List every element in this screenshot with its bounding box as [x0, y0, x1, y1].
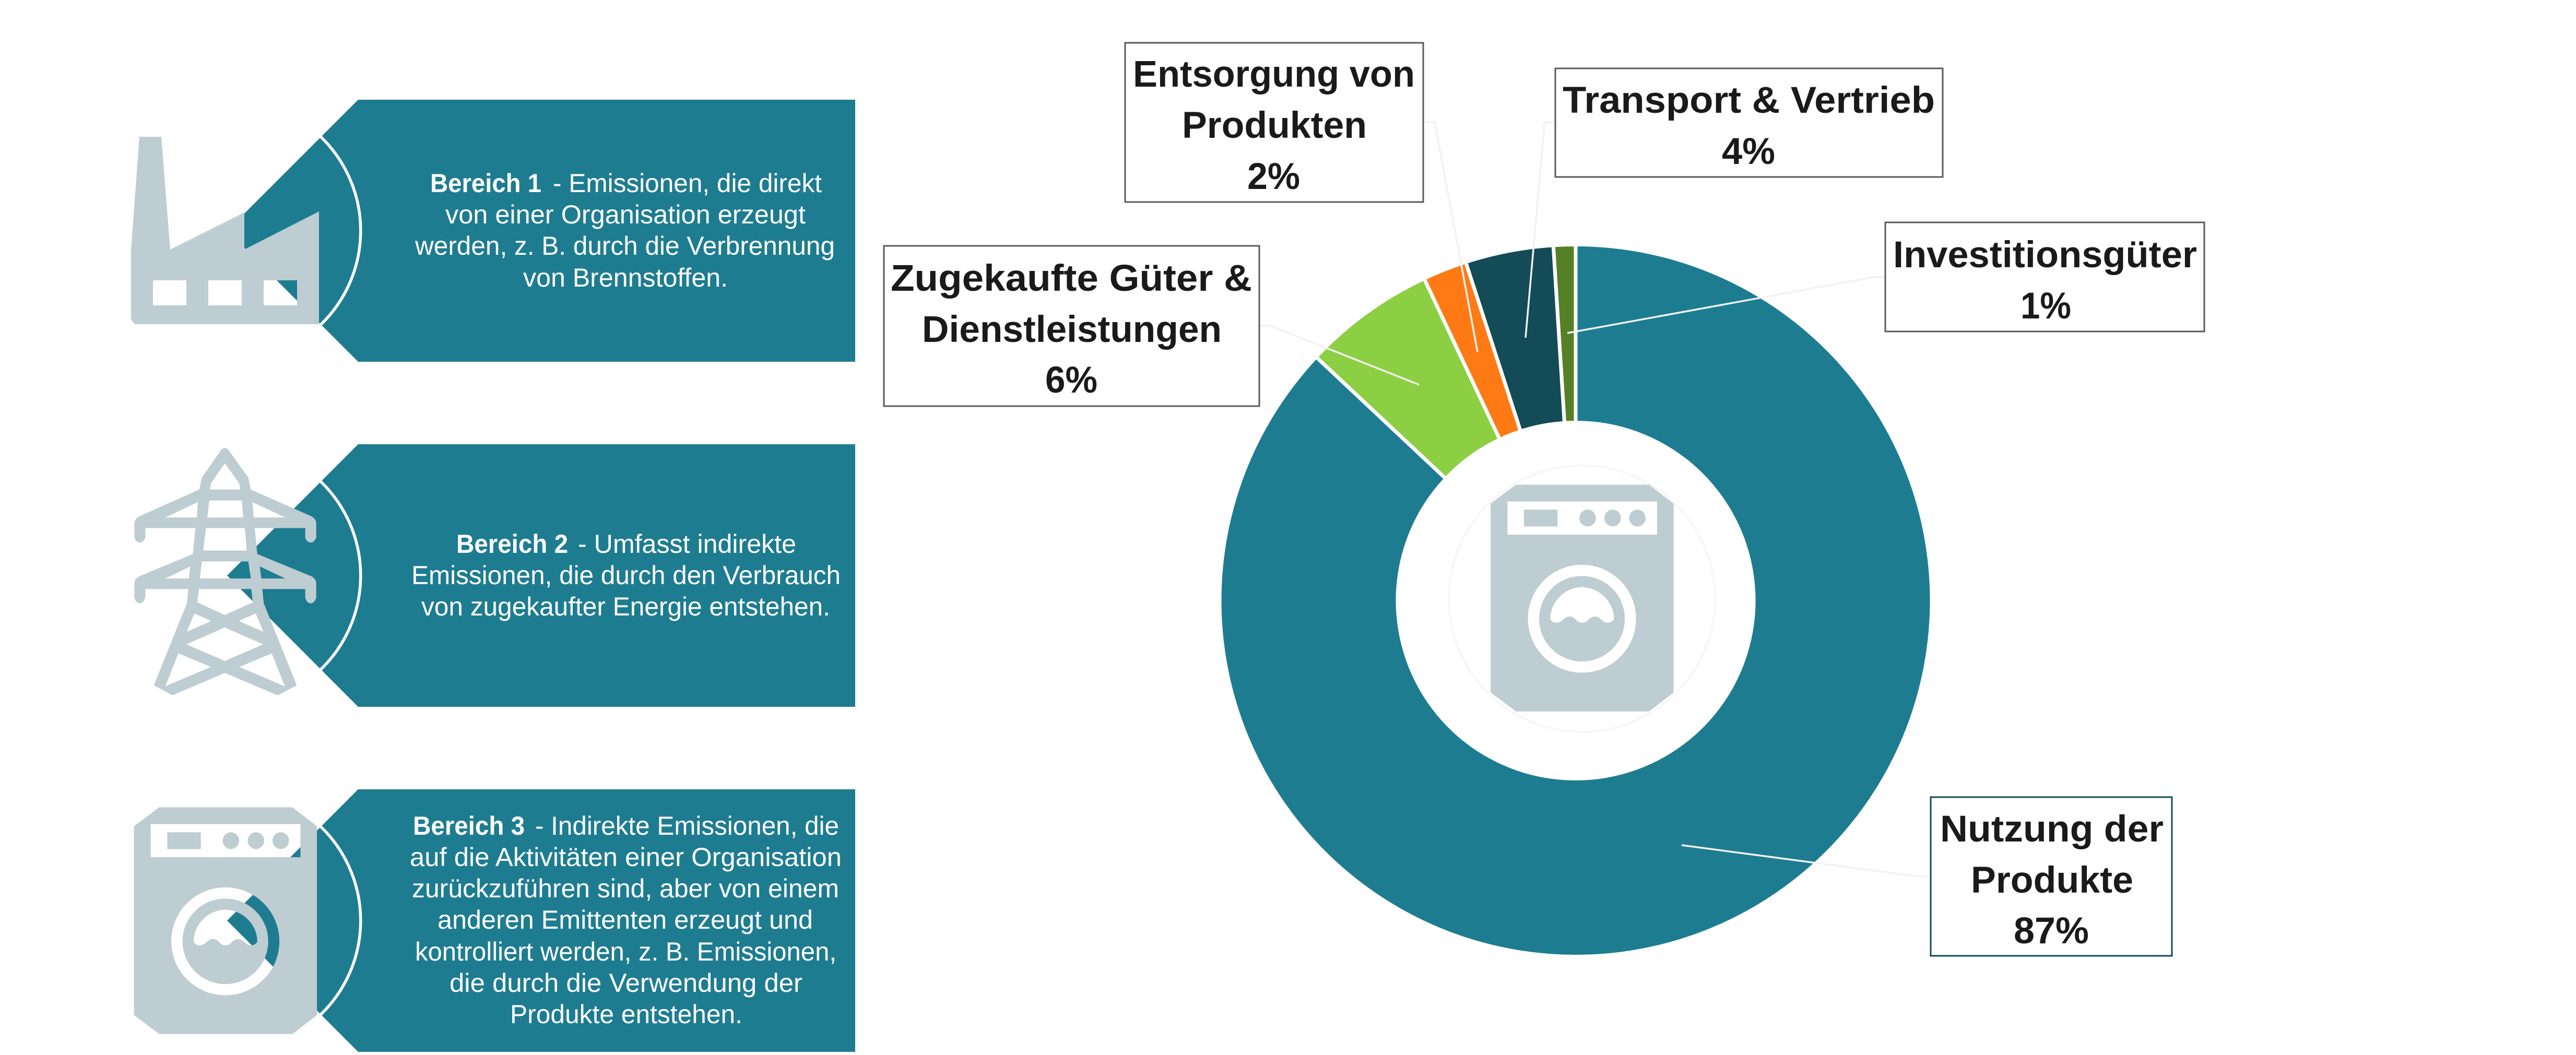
callout: Investitionsgüter: Investitionsgüter — [1893, 234, 2197, 276]
segment: Zugekaufte Güter 6% — [1316, 278, 1500, 479]
callout: Nutzung der Produkte — [1931, 797, 2172, 956]
text: Bereich 2: - Umfasst indirekte — [578, 529, 796, 559]
segment: Transport 4% — [1466, 245, 1565, 431]
callout: Investitionsgüter: 1% — [2020, 286, 2071, 327]
callout: Transport & Vertrieb — [1555, 68, 1943, 177]
panel: Bereich 2 — [134, 444, 855, 707]
text: Bereich 1: werden, z. B. durch die Verbrennung — [415, 231, 835, 260]
callout: Zugekaufte Güter & Dienstleistungen: Dienstleistungen — [922, 309, 1222, 350]
leader lines — [1259, 122, 1930, 876]
callout: Zugekaufte Güter & Dienstleistungen: 6% — [1045, 360, 1097, 401]
callout: Zugekaufte Güter & Dienstleistungen: Zugekaufte Güter & — [891, 258, 1252, 299]
text: Bereich 3: Bereich 3 — [413, 811, 525, 840]
segment: Investitionsgüter 1% — [1553, 244, 1576, 423]
text: Bereich 3: anderen Emittenten erzeugt und — [438, 905, 813, 934]
donut chart — [1220, 244, 1932, 956]
banner shape 3 — [227, 789, 855, 1052]
segment: Nutzung der Produkte 87% — [1220, 244, 1932, 956]
text: Bereich 1 — [415, 169, 835, 292]
arc divider 3 — [318, 825, 361, 1017]
text: Bereich 1: von Brennstoffen. — [523, 263, 728, 292]
text: Bereich 2 — [411, 529, 841, 621]
callout: Entsorgung von Produkten: 2% — [1247, 156, 1300, 197]
text: Bereich 2: Emissionen, die durch den Verbrauch — [411, 561, 841, 590]
panel: Bereich 1 — [131, 100, 855, 362]
center icon: washing machine — [1449, 466, 1715, 732]
text: Bereich 3: Produkte entstehen. — [510, 1000, 742, 1029]
callout: Nutzung der Produkte: Produkte — [1971, 860, 2133, 901]
icon: power pylon — [134, 448, 316, 695]
text: Bereich 1: von einer Organisation erzeugt — [445, 200, 806, 229]
callout: Entsorgung von Produkten: Produkten — [1182, 105, 1367, 146]
icon: factory — [131, 137, 319, 324]
text: Bereich 1: Bereich 1 — [430, 169, 541, 198]
banner shape 2 — [227, 444, 855, 707]
callout: Nutzung der Produkte: Nutzung der — [1940, 809, 2164, 850]
arc divider 1 — [318, 135, 361, 327]
text: Bereich 3: auf die Aktivitäten einer Organisation — [410, 843, 842, 872]
text: Bereich 3: kontrolliert werden, z. B. Emissionen, — [415, 937, 836, 966]
text: Bereich 3 — [410, 811, 842, 1029]
panel: Bereich 3 — [134, 789, 855, 1052]
text: Bereich 1: - Emissionen, die direkt — [553, 169, 822, 198]
callout: Zugekaufte Güter & Dienstleistungen — [884, 246, 1259, 406]
text: Bereich 2: Bereich 2 — [456, 529, 568, 559]
callout: Nutzung der Produkte: 87% — [2014, 910, 2089, 952]
banner shape 1 — [227, 100, 855, 362]
text: Bereich 2: von zugekaufter Energie entstehen. — [421, 592, 830, 621]
icon: washing machine — [134, 807, 317, 1034]
text: Bereich 3: zurückzuführen sind, aber von einem — [412, 874, 839, 903]
callout: Entsorgung von Produkten: Entsorgung von — [1133, 54, 1415, 95]
callout: Transport & Vertrieb: 4% — [1722, 131, 1775, 172]
callout: Investitionsgüter — [1885, 222, 2204, 331]
text: Bereich 3: die durch die Verwendung der — [450, 968, 802, 998]
callout: Transport & Vertrieb: Transport & Vertrieb — [1563, 80, 1935, 121]
text: Bereich 3: - Indirekte Emissionen, die — [535, 811, 839, 840]
segment: Entsorgung 2% — [1424, 262, 1521, 440]
arc divider 2 — [318, 479, 361, 671]
callout: Entsorgung von Produkten — [1125, 43, 1423, 202]
